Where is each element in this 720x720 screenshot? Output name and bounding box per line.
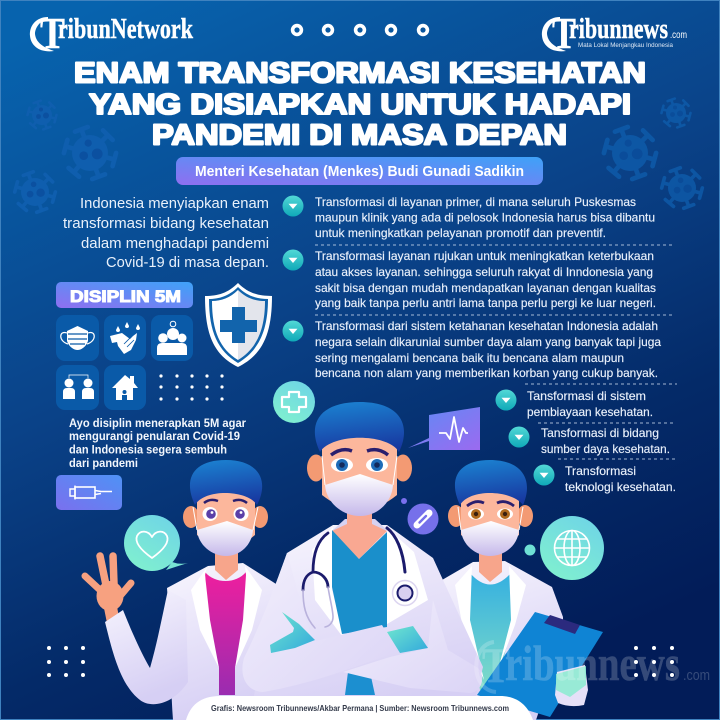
subtitle pill: Menteri Kesehatan (Menkes) Budi Gunadi Sadikin bbox=[195, 163, 524, 180]
text: ajakan 5M: dan Indonesia segera sembuh bbox=[69, 442, 227, 456]
list item 6 bbox=[534, 464, 676, 494]
list item 3: Transformasi dari sistem ketahanan kesehatan Indonesia adalah bbox=[315, 319, 658, 333]
list item 2: Transformasi layanan rujukan untuk meningkatkan keterbukaan bbox=[315, 249, 654, 263]
list item 3: bencana non alam yang memberikan korban yang cukup banyak. bbox=[315, 366, 658, 380]
title: ENAM TRANSFORMASI KESEHATAN bbox=[74, 58, 646, 90]
subtitle pill bbox=[176, 157, 543, 185]
dot grid bottom right bbox=[634, 646, 674, 677]
intro text: transformasi bidang kesehatan bbox=[63, 215, 269, 232]
ears bbox=[183, 506, 199, 528]
icon: avoid crowds bbox=[151, 315, 193, 361]
dot grid bottom left bbox=[47, 646, 85, 677]
eyes and brows bbox=[468, 508, 484, 520]
sleeve bbox=[105, 590, 188, 704]
list item 5: Tansformasi di bidang bbox=[541, 426, 659, 440]
waving hand bbox=[85, 556, 131, 620]
lapels bbox=[191, 567, 219, 668]
mask bbox=[197, 521, 253, 556]
list item 1: Transformasi di layanan primer, di mana seluruh Puskesmas bbox=[315, 195, 636, 209]
intro text: dalam menghadapi pandemi bbox=[81, 235, 269, 252]
list item 4: pembiayaan kesehatan. bbox=[527, 405, 653, 419]
doctor left bbox=[85, 460, 300, 720]
footer credit: Grafis: Newsroom Tribunnews/Akbar Permana | Sumber: Newsroom Tribunnews.com bbox=[211, 703, 509, 713]
list item 5 bbox=[508, 426, 670, 456]
text: ajakan 5M bbox=[69, 416, 246, 470]
face bbox=[322, 437, 397, 510]
text: ajakan 5M: dari pandemi bbox=[69, 456, 138, 470]
list item 3: negara selain dikaruniai sumber daya alam yang banyak tapi juga bbox=[315, 335, 661, 349]
footer credit bbox=[186, 696, 533, 720]
background viruses right bbox=[604, 99, 702, 208]
watermark: T bbox=[482, 637, 510, 693]
mask bbox=[325, 474, 393, 516]
list item 3 bbox=[282, 319, 661, 380]
logo: Tribunnews.com: ribunnews bbox=[569, 13, 668, 45]
mask bbox=[461, 521, 519, 556]
icon: globe bubble bbox=[524, 516, 604, 580]
right forearm and elbow bbox=[343, 600, 482, 693]
ears bbox=[448, 505, 464, 527]
title bbox=[74, 58, 646, 152]
icon: pulse speech box bbox=[408, 407, 480, 450]
list item 5: sumber daya kesehatan. bbox=[541, 442, 670, 456]
pink shirt bbox=[205, 572, 246, 695]
list item 2 bbox=[282, 249, 656, 310]
scrub bbox=[470, 573, 511, 690]
watermark: .com bbox=[683, 667, 710, 684]
cap bbox=[455, 460, 527, 505]
text: ajakan 5M: mengurangi penularan Covid-19 bbox=[69, 429, 240, 443]
icon: syringe bbox=[56, 475, 122, 510]
logo: Tribunnews.com: T bbox=[552, 9, 576, 58]
icon: stay home bbox=[104, 365, 146, 410]
coat bbox=[167, 563, 300, 720]
title: YANG DISIAPKAN UNTUK HADAPI bbox=[89, 89, 631, 121]
cap bbox=[315, 402, 404, 452]
list item 4: Tansformasi di sistem bbox=[527, 389, 646, 403]
Disiplin 5M heading bbox=[56, 282, 193, 308]
right glove bbox=[387, 626, 428, 653]
coat bbox=[250, 525, 483, 720]
icon: pill bubble bbox=[401, 498, 438, 534]
list item 2: atau akses layanan. sehingga seluruh rakyat di Inndonesia yang bbox=[315, 265, 653, 279]
lapels bbox=[455, 566, 484, 680]
ears bbox=[307, 454, 325, 482]
logo: TribunNetwork: T bbox=[40, 9, 65, 58]
clipboard bbox=[477, 612, 603, 717]
eyes and brows bbox=[202, 507, 218, 521]
list item 1 bbox=[282, 195, 655, 240]
list item 2: sakit bisa dengan mudah mendapatkan layanan dengan kualitas bbox=[315, 281, 656, 295]
coat bbox=[425, 561, 563, 720]
text: ajakan 5M: Ayo disiplin menerapkan 5M agar bbox=[69, 416, 246, 430]
stethoscope bbox=[303, 528, 418, 628]
list item 3: sering mengalami bencana baik itu bencana alam maupun bbox=[315, 351, 624, 365]
logo: Tribunnews.com: Mata Lokal Menjangkau Indonesia bbox=[578, 42, 673, 49]
face bbox=[197, 490, 255, 548]
left arm bbox=[242, 553, 398, 692]
logo: TribunNetwork bbox=[30, 9, 194, 58]
list item 6: teknologi kesehatan. bbox=[565, 480, 676, 494]
neck bbox=[215, 545, 238, 580]
list item 1: untuk meningkatkan pelayanan promotif dan preventif. bbox=[315, 226, 606, 240]
white lapels bbox=[312, 527, 345, 640]
face bbox=[461, 490, 519, 548]
header dots bbox=[293, 26, 427, 34]
icon: heart bubble bbox=[124, 515, 188, 571]
list item 4 bbox=[496, 389, 653, 419]
scrub bbox=[332, 530, 387, 634]
doctor right bbox=[425, 460, 603, 720]
icon: keep distance bbox=[56, 365, 99, 410]
title: PANDEMI DI MASA DEPAN bbox=[152, 120, 567, 152]
scrub lower bbox=[345, 672, 375, 695]
icon: mask bbox=[56, 315, 99, 361]
neck bbox=[479, 545, 502, 582]
logo: TribunNetwork: ribunNetwork bbox=[58, 13, 194, 45]
glove and cuff bbox=[555, 665, 588, 706]
list item 6: Transformasi bbox=[565, 464, 636, 478]
dot grid 5M bbox=[159, 374, 224, 401]
Disiplin 5M heading: DISIPLIN 5M bbox=[70, 287, 181, 306]
icon: shield bbox=[205, 283, 272, 367]
intro text: Indonesia menyiapkan enam bbox=[80, 195, 269, 212]
eyes and brows bbox=[331, 458, 353, 472]
list item 1: maupun klinik yang ada di pelosok Indonesia harus bisa dibantu bbox=[315, 210, 655, 224]
logo: Tribunnews.com bbox=[542, 9, 687, 58]
list item 2: yang baik tanpa perlu antri lama tanpa perlu pergi ke luar negeri. bbox=[315, 296, 656, 310]
cap bbox=[190, 460, 262, 505]
logo: Tribunnews.com: .com bbox=[670, 30, 687, 41]
icon: washing hands bbox=[104, 315, 146, 361]
left glove bbox=[270, 612, 315, 653]
intro text: Covid-19 di masa depan. bbox=[106, 254, 269, 271]
intro text bbox=[63, 195, 269, 271]
collar and neck bbox=[333, 519, 387, 545]
background viruses left bbox=[15, 101, 116, 212]
doctor center bbox=[242, 402, 483, 720]
icon: medical cross bubble bbox=[273, 381, 315, 423]
